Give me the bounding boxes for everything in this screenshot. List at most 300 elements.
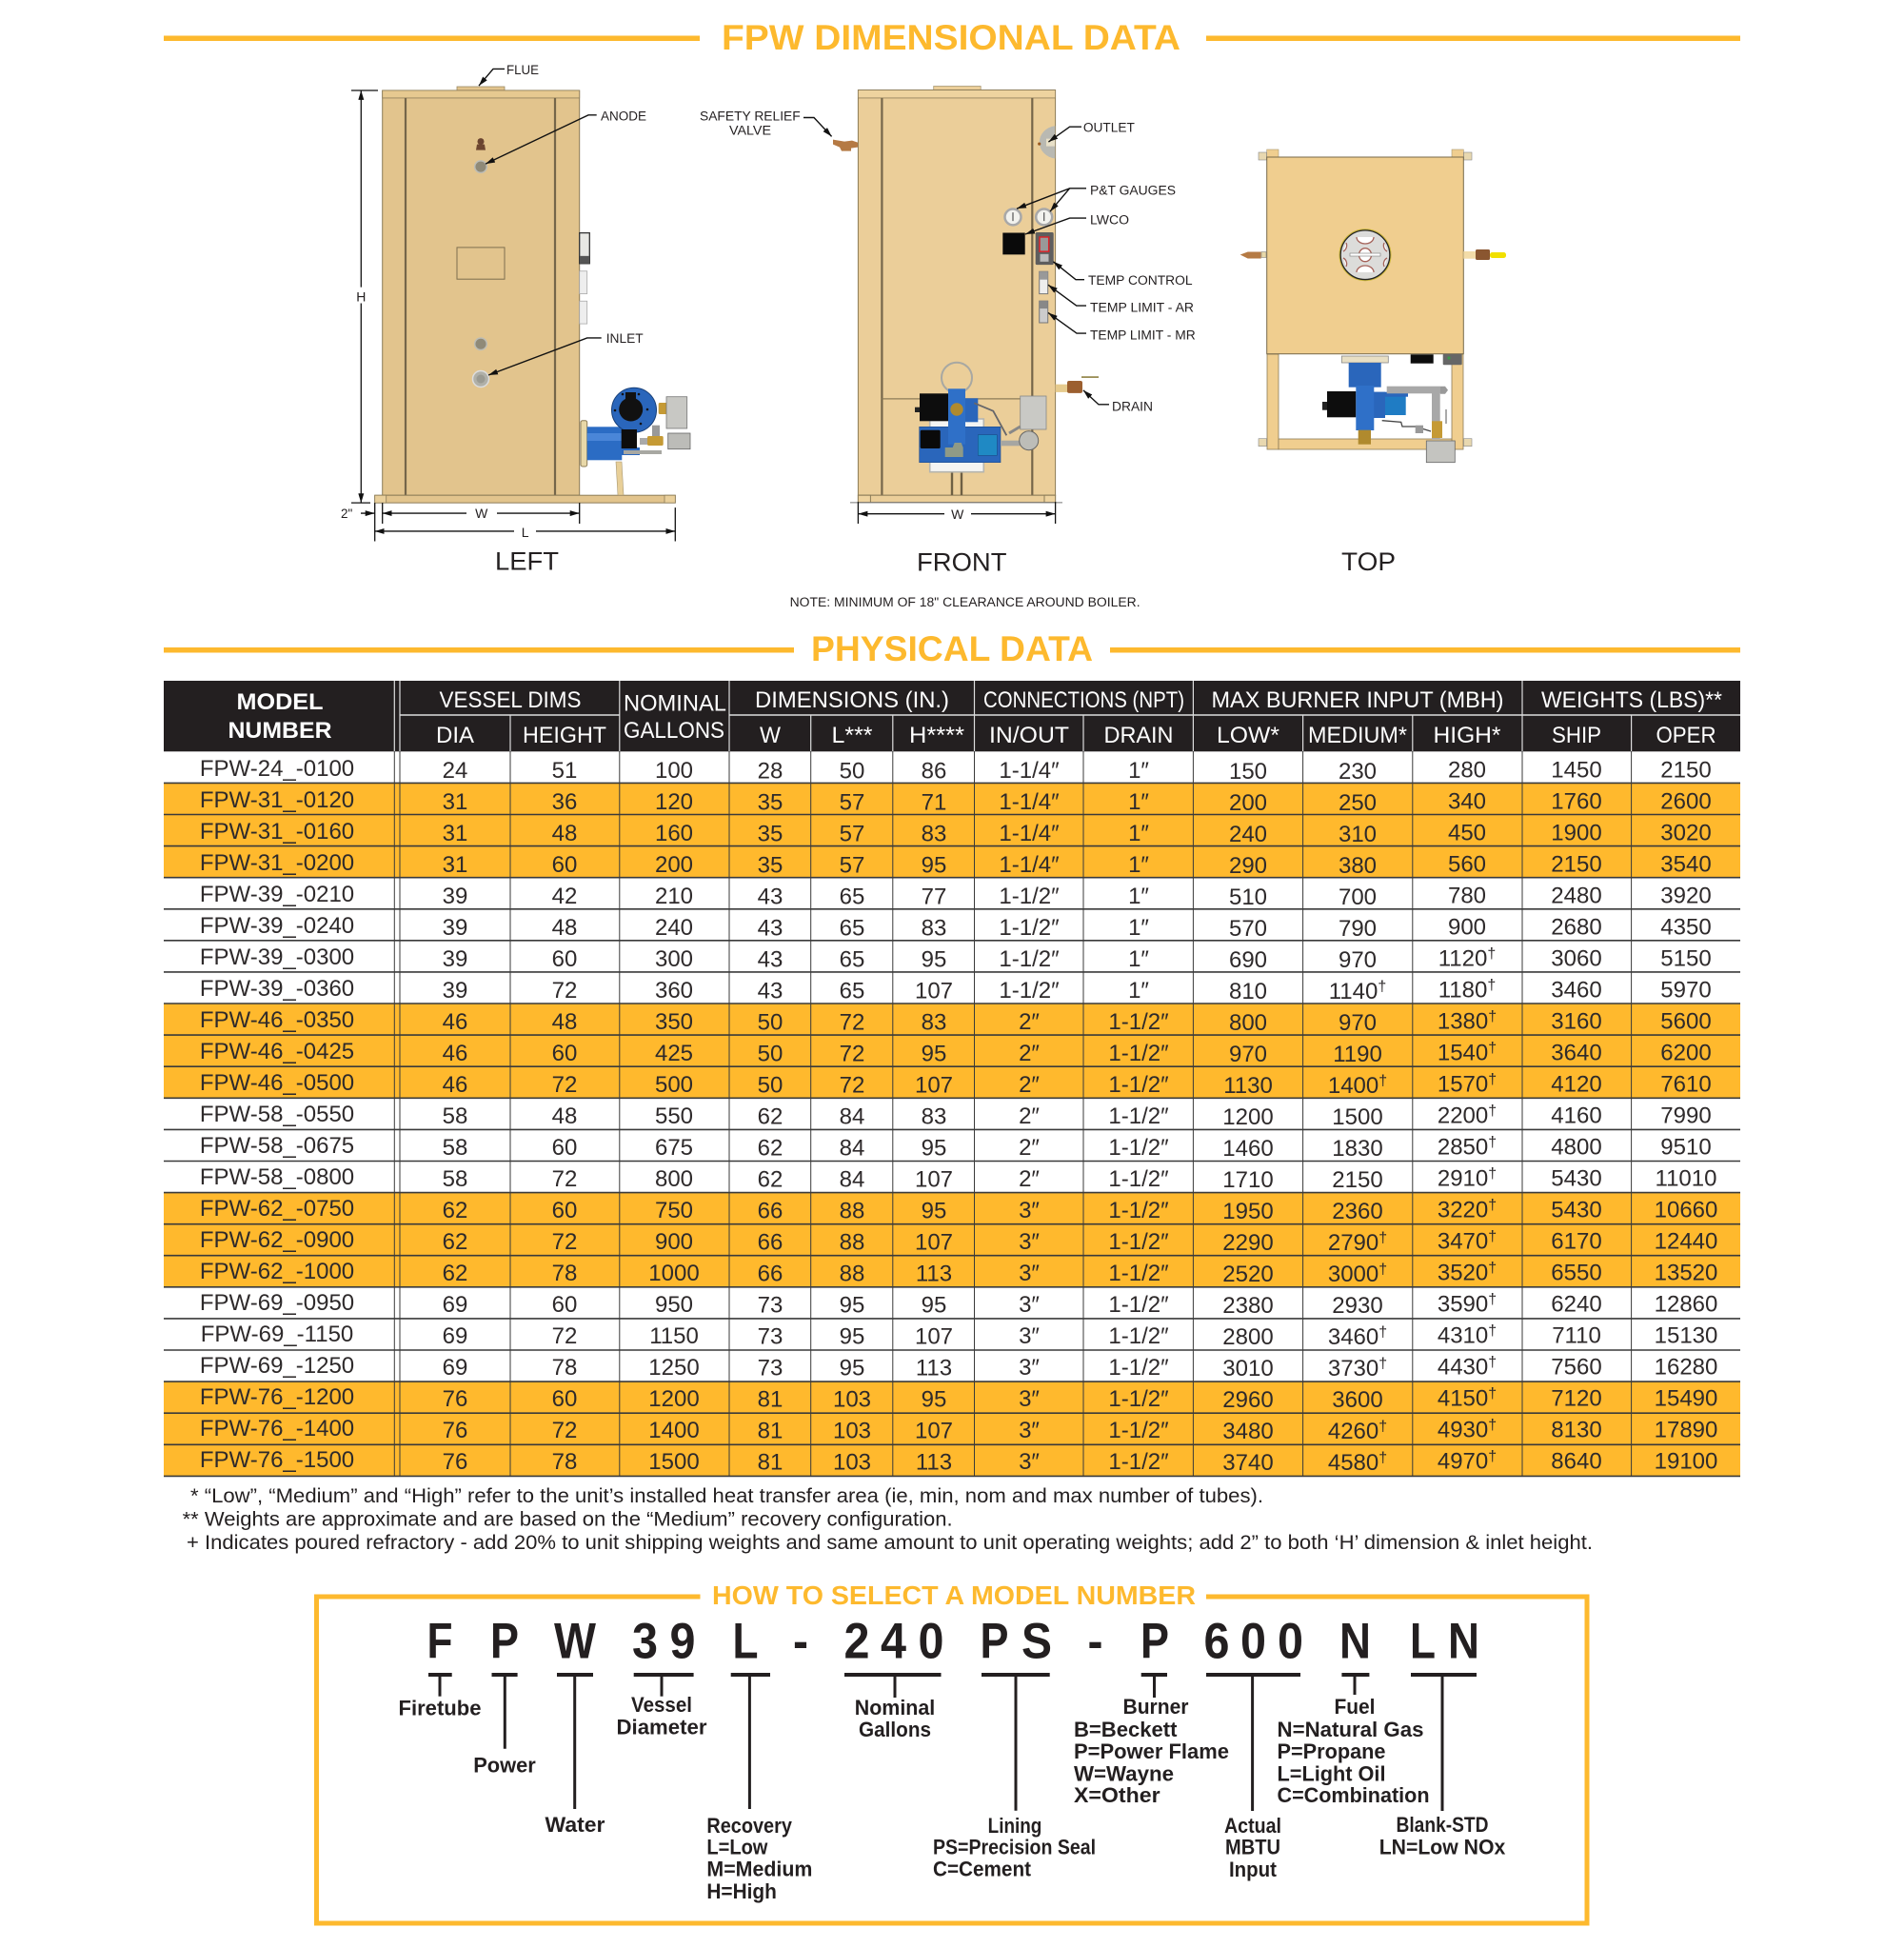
row FPW-69_-1150: 15130 xyxy=(1655,1322,1717,1348)
row FPW-58_-0550: 1500 xyxy=(1332,1104,1383,1130)
row FPW-62_-0750: 62 xyxy=(443,1198,467,1223)
row FPW-62_-0900 xyxy=(164,1224,1740,1256)
row FPW-58_-0800: † xyxy=(1488,1165,1497,1182)
key: NOx option xyxy=(1379,1675,1506,1859)
burner left xyxy=(581,388,690,495)
row FPW-39_-0300: 95 xyxy=(922,946,946,972)
row FPW-62_-0900: 107 xyxy=(915,1230,953,1255)
callout: inlet xyxy=(488,331,644,375)
row FPW-62_-1000: 1000 xyxy=(648,1261,700,1286)
row FPW-46_-0500: 1570 xyxy=(1438,1071,1488,1097)
key: actual MBTU input: MBTU xyxy=(1225,1836,1280,1859)
table header: L*** xyxy=(832,723,872,748)
row FPW-31_-0120: 57 xyxy=(840,789,864,815)
row FPW-76_-1200: 4150 xyxy=(1438,1386,1488,1411)
row FPW-39_-0300: 65 xyxy=(840,946,864,972)
key: nominal gallons: Gallons xyxy=(859,1718,931,1741)
callout: outlet xyxy=(1038,121,1135,159)
row FPW-46_-0425: 60 xyxy=(552,1041,577,1066)
row FPW-58_-0550: 1200 xyxy=(1222,1104,1274,1130)
row FPW-69_-1150: FPW-69_-1150 xyxy=(201,1322,353,1347)
key: burner: W=Wayne xyxy=(1074,1762,1174,1786)
table header: MEDIUM* xyxy=(1308,723,1407,748)
row FPW-69_-0950 xyxy=(200,1290,1717,1319)
row FPW-69_-1250: 3″ xyxy=(1019,1355,1040,1381)
burner front xyxy=(915,363,1046,495)
row FPW-46_-0500: 1130 xyxy=(1223,1073,1273,1099)
panel: top view diagram xyxy=(1240,149,1506,576)
row FPW-46_-0500: 46 xyxy=(443,1072,467,1098)
row FPW-76_-1400: 1400 xyxy=(648,1418,700,1443)
row FPW-76_-1400: 17890 xyxy=(1655,1418,1717,1443)
row FPW-76_-1500: 4580 xyxy=(1328,1450,1378,1476)
row FPW-62_-0750: 66 xyxy=(758,1198,783,1223)
row FPW-31_-0120: 200 xyxy=(1229,790,1267,816)
row FPW-31_-0200: 1-1/4″ xyxy=(999,852,1060,878)
row FPW-46_-0500: 72 xyxy=(840,1072,864,1098)
row FPW-76_-1200: 95 xyxy=(922,1386,946,1413)
row FPW-58_-0550: 58 xyxy=(443,1103,467,1129)
row FPW-31_-0200: 95 xyxy=(922,852,946,878)
row FPW-31_-0200: 3540 xyxy=(1660,851,1712,877)
row FPW-69_-1250: † xyxy=(1378,1356,1387,1372)
row FPW-69_-1250 xyxy=(200,1353,1717,1381)
dimension: H: H xyxy=(356,289,366,305)
frame and heading xyxy=(316,1580,1587,1923)
row FPW-24_-0100: 2150 xyxy=(1660,757,1712,783)
row FPW-76_-1400: 76 xyxy=(443,1418,467,1443)
table header: NUMBER xyxy=(228,718,331,744)
row FPW-76_-1200: 3″ xyxy=(1019,1386,1040,1412)
row FPW-39_-0210: 1-1/2″ xyxy=(999,884,1060,909)
row FPW-31_-0120: 2600 xyxy=(1660,788,1712,814)
row FPW-62_-0750: 1950 xyxy=(1222,1199,1274,1224)
row FPW-31_-0200: 2150 xyxy=(1551,851,1602,877)
row FPW-39_-0210: 3920 xyxy=(1660,883,1712,908)
row FPW-62_-1000: 66 xyxy=(758,1261,783,1286)
example model code: L xyxy=(733,1614,758,1670)
row FPW-31_-0160: 35 xyxy=(758,821,783,846)
row FPW-62_-0900: 2290 xyxy=(1222,1230,1274,1256)
row FPW-69_-1150: 95 xyxy=(840,1323,864,1349)
key: water: Water xyxy=(545,1813,605,1837)
row FPW-69_-0950: 6240 xyxy=(1551,1291,1602,1317)
row FPW-76_-1200: 60 xyxy=(552,1386,577,1412)
row FPW-24_-0100: 280 xyxy=(1448,757,1486,783)
row FPW-69_-1250: 113 xyxy=(916,1355,952,1381)
row FPW-62_-0900: 88 xyxy=(840,1230,864,1255)
key: actual MBTU input: Input xyxy=(1229,1858,1278,1881)
row FPW-69_-0950: FPW-69_-0950 xyxy=(200,1290,354,1316)
row FPW-39_-0300: 690 xyxy=(1229,947,1267,973)
row FPW-69_-1150: 107 xyxy=(915,1323,953,1349)
row FPW-58_-0550: 84 xyxy=(840,1103,864,1129)
row FPW-39_-0300: 43 xyxy=(758,946,783,972)
panel: front view diagram xyxy=(700,87,1196,577)
row FPW-69_-1150: 3″ xyxy=(1019,1323,1040,1349)
row FPW-39_-0300: 3060 xyxy=(1551,945,1602,971)
row FPW-46_-0425: 3640 xyxy=(1551,1040,1602,1065)
row FPW-46_-0350: 3160 xyxy=(1551,1008,1602,1034)
callout: anode: ANODE xyxy=(601,109,646,123)
row FPW-76_-1400: 72 xyxy=(552,1418,577,1443)
row FPW-31_-0160: 83 xyxy=(922,821,946,846)
row FPW-39_-0240: 900 xyxy=(1448,914,1486,940)
row FPW-31_-0160: 160 xyxy=(655,821,693,846)
table header: VESSEL DIMS xyxy=(440,687,581,713)
row FPW-58_-0675: FPW-58_-0675 xyxy=(200,1133,354,1159)
row FPW-46_-0350: 5600 xyxy=(1660,1008,1712,1034)
row FPW-62_-0750: 95 xyxy=(922,1198,946,1223)
example model code: 4 xyxy=(881,1614,906,1670)
row FPW-62_-1000: 3520 xyxy=(1438,1260,1488,1285)
row FPW-69_-0950: 2380 xyxy=(1222,1293,1274,1319)
table header: DRAIN xyxy=(1104,723,1173,748)
row FPW-69_-1150: 73 xyxy=(758,1323,783,1349)
row FPW-31_-0160: 310 xyxy=(1339,822,1377,847)
row FPW-69_-1150: 1150 xyxy=(649,1323,699,1349)
row FPW-39_-0300: 60 xyxy=(552,946,577,972)
row FPW-76_-1500: FPW-76_-1500 xyxy=(200,1447,354,1473)
row FPW-39_-0210: 39 xyxy=(443,884,467,909)
row FPW-24_-0100: 1450 xyxy=(1551,757,1602,783)
key: actual MBTU input xyxy=(1206,1675,1300,1881)
row FPW-24_-0100: 150 xyxy=(1229,759,1267,785)
row FPW-39_-0240: 570 xyxy=(1229,916,1267,942)
row FPW-31_-0200: 380 xyxy=(1339,853,1377,879)
row FPW-39_-0360: 39 xyxy=(443,978,467,1004)
row FPW-46_-0425: 1-1/2″ xyxy=(1108,1041,1169,1066)
row FPW-62_-1000: † xyxy=(1488,1260,1497,1276)
row FPW-39_-0360: FPW-39_-0360 xyxy=(200,976,354,1002)
row FPW-31_-0120: 120 xyxy=(655,789,693,815)
row FPW-39_-0360: 1140 xyxy=(1329,979,1378,1004)
row FPW-31_-0120: 71 xyxy=(922,789,946,815)
row FPW-39_-0360: 1-1/2″ xyxy=(999,978,1060,1004)
key: fuel: L=Light Oil xyxy=(1278,1762,1386,1786)
row FPW-46_-0500: 50 xyxy=(758,1072,783,1098)
row FPW-46_-0425: 970 xyxy=(1229,1042,1267,1067)
row FPW-31_-0120: 1-1/4″ xyxy=(999,789,1060,815)
table header: DIA xyxy=(436,723,474,748)
key: fuel: P=Propane xyxy=(1278,1739,1386,1763)
row FPW-39_-0360 xyxy=(200,976,1712,1004)
row FPW-58_-0675: 1830 xyxy=(1332,1136,1383,1162)
row FPW-46_-0425: 2″ xyxy=(1019,1041,1040,1066)
tank body front xyxy=(850,87,1062,503)
row FPW-46_-0425: 95 xyxy=(922,1041,946,1066)
row FPW-76_-1400: 103 xyxy=(833,1419,871,1444)
row FPW-69_-0950: 73 xyxy=(758,1292,783,1318)
key: recovery: Recovery xyxy=(706,1814,793,1838)
row FPW-58_-0800: 58 xyxy=(443,1166,467,1192)
callout: P&T gauges xyxy=(1005,183,1176,225)
row FPW-69_-1250: FPW-69_-1250 xyxy=(200,1353,354,1379)
row FPW-58_-0800: 2150 xyxy=(1332,1167,1383,1193)
row FPW-76_-1400: 81 xyxy=(758,1419,783,1444)
callout: LWCO xyxy=(1002,213,1129,254)
footnotes xyxy=(183,1485,1593,1554)
heading: physical data xyxy=(164,629,1740,668)
row FPW-58_-0800: 2910 xyxy=(1438,1165,1488,1191)
example model code: P xyxy=(981,1614,1009,1670)
example model code: 0 xyxy=(918,1614,944,1670)
row FPW-62_-0750: † xyxy=(1488,1197,1497,1213)
row FPW-76_-1400: 8130 xyxy=(1551,1418,1602,1443)
row FPW-31_-0200 xyxy=(164,846,1740,879)
row FPW-76_-1400: 4930 xyxy=(1438,1418,1488,1443)
callout: temp limit MR xyxy=(1040,301,1196,342)
row FPW-62_-1000 xyxy=(164,1256,1740,1287)
row FPW-69_-1250: 1250 xyxy=(648,1355,700,1381)
row FPW-69_-1250: 16280 xyxy=(1655,1354,1717,1380)
row FPW-58_-0800 xyxy=(200,1164,1716,1193)
row FPW-39_-0300: 1-1/2″ xyxy=(999,946,1060,972)
table header xyxy=(164,681,1740,751)
row FPW-39_-0300: 39 xyxy=(443,946,467,972)
row FPW-31_-0200: 1″ xyxy=(1128,852,1149,878)
row FPW-58_-0675: 2850 xyxy=(1438,1134,1488,1160)
row FPW-69_-1150: 2800 xyxy=(1222,1324,1274,1350)
row FPW-46_-0425: 1540 xyxy=(1438,1040,1488,1065)
row FPW-46_-0350: 72 xyxy=(840,1009,864,1035)
row FPW-69_-0950: 95 xyxy=(922,1292,946,1318)
row FPW-46_-0350: 970 xyxy=(1339,1010,1377,1036)
row FPW-62_-0900: 3″ xyxy=(1019,1229,1040,1255)
row FPW-58_-0800: 11010 xyxy=(1656,1165,1716,1191)
row FPW-58_-0675: 58 xyxy=(443,1135,467,1161)
row FPW-76_-1400: 4260 xyxy=(1328,1419,1378,1444)
row FPW-46_-0350: † xyxy=(1488,1008,1497,1024)
panel: how to select a model number xyxy=(316,1580,1587,1923)
row FPW-62_-0900: † xyxy=(1378,1230,1387,1246)
row FPW-39_-0210: 43 xyxy=(758,884,783,909)
handhole xyxy=(1339,229,1391,281)
row FPW-62_-0750: 2360 xyxy=(1332,1199,1383,1224)
callout: LWCO: LWCO xyxy=(1090,213,1129,227)
row FPW-69_-1250: 69 xyxy=(443,1355,467,1381)
row FPW-76_-1200: 1200 xyxy=(648,1386,700,1412)
row FPW-39_-0360: 72 xyxy=(552,978,577,1004)
row FPW-58_-0550: 2″ xyxy=(1019,1103,1040,1129)
table header: SHIP xyxy=(1552,723,1601,748)
example model code: N xyxy=(1339,1614,1371,1670)
row FPW-31_-0160: 1900 xyxy=(1551,820,1602,845)
row FPW-58_-0550: 48 xyxy=(552,1103,577,1129)
row FPW-62_-0750: 60 xyxy=(552,1198,577,1223)
row FPW-76_-1200: 2960 xyxy=(1222,1387,1274,1413)
row FPW-39_-0300: 1120 xyxy=(1438,945,1487,971)
row FPW-46_-0425: 72 xyxy=(840,1041,864,1066)
key: recovery: M=Medium xyxy=(706,1858,812,1881)
row FPW-76_-1500: 78 xyxy=(552,1449,577,1475)
row FPW-39_-0300: 970 xyxy=(1339,947,1377,973)
row FPW-58_-0800: 62 xyxy=(758,1166,783,1192)
row FPW-39_-0240: 39 xyxy=(443,915,467,941)
row FPW-39_-0210 xyxy=(200,882,1712,910)
row FPW-46_-0500: † xyxy=(1378,1073,1387,1089)
row FPW-39_-0360: 3460 xyxy=(1551,977,1602,1003)
dimension: W: W xyxy=(951,507,964,522)
row FPW-76_-1400 xyxy=(164,1413,1740,1444)
row FPW-69_-1150 xyxy=(201,1322,1717,1350)
row FPW-69_-1250: † xyxy=(1488,1354,1497,1370)
callout: temp limit MR: TEMP LIMIT - MR xyxy=(1090,328,1196,342)
row FPW-31_-0120 xyxy=(164,783,1740,816)
key: vessel diameter xyxy=(617,1675,707,1739)
row FPW-76_-1500: † xyxy=(1488,1449,1497,1465)
row FPW-39_-0300: † xyxy=(1487,945,1496,962)
row FPW-62_-0750: 10660 xyxy=(1655,1197,1717,1222)
row FPW-69_-0950: 60 xyxy=(552,1292,577,1318)
row FPW-58_-0550: FPW-58_-0550 xyxy=(200,1102,354,1127)
row FPW-46_-0350: 350 xyxy=(655,1009,693,1035)
row FPW-62_-1000: 3000 xyxy=(1328,1262,1378,1287)
table header: OPER xyxy=(1656,723,1716,748)
row FPW-31_-0160: 240 xyxy=(1229,822,1267,847)
row FPW-62_-1000: † xyxy=(1378,1262,1387,1278)
row FPW-76_-1400: 3″ xyxy=(1019,1418,1040,1443)
example model code: N xyxy=(1448,1614,1479,1670)
row FPW-39_-0210: 780 xyxy=(1448,883,1486,908)
row FPW-58_-0550: 7990 xyxy=(1660,1103,1712,1128)
example model code: P xyxy=(490,1614,519,1670)
row FPW-39_-0360: 5970 xyxy=(1660,977,1712,1003)
table header: W xyxy=(760,723,781,748)
row FPW-31_-0120: 1″ xyxy=(1128,789,1149,815)
row FPW-76_-1500: 3740 xyxy=(1222,1450,1274,1476)
row FPW-69_-1250: 78 xyxy=(552,1355,577,1381)
row FPW-39_-0210: 210 xyxy=(655,884,693,909)
key: burner: X=Other xyxy=(1074,1783,1160,1807)
row FPW-69_-0950: 12860 xyxy=(1655,1291,1717,1317)
row FPW-76_-1500: 1500 xyxy=(648,1449,700,1475)
row FPW-76_-1400: 1-1/2″ xyxy=(1108,1418,1169,1443)
row FPW-24_-0100: 28 xyxy=(758,758,783,784)
row FPW-58_-0675: 1-1/2″ xyxy=(1108,1135,1169,1161)
row FPW-39_-0240: FPW-39_-0240 xyxy=(200,913,354,939)
row FPW-76_-1400: † xyxy=(1378,1419,1387,1435)
row FPW-31_-0200: 60 xyxy=(552,852,577,878)
row FPW-31_-0200: 35 xyxy=(758,852,783,878)
callout: safety relief valve xyxy=(700,109,858,151)
row FPW-31_-0160 xyxy=(164,815,1740,847)
row FPW-58_-0675: 675 xyxy=(655,1135,693,1161)
row FPW-31_-0200: 290 xyxy=(1229,853,1267,879)
row FPW-62_-0750: 1-1/2″ xyxy=(1108,1198,1169,1223)
footnotes: + Indicates poured refractory - add 20% to unit shipping weights and same amount to unit operating weights; add 2” to both ‘H’ dimension & inlet height. xyxy=(187,1532,1593,1554)
row FPW-62_-1000: 6550 xyxy=(1551,1260,1602,1285)
row FPW-58_-0800: 107 xyxy=(915,1166,953,1192)
row FPW-76_-1200: 1-1/2″ xyxy=(1108,1386,1169,1412)
key: nominal gallons: Nominal xyxy=(855,1696,935,1719)
side valves xyxy=(1240,249,1506,260)
row FPW-46_-0425: FPW-46_-0425 xyxy=(200,1039,354,1064)
row FPW-76_-1500: 76 xyxy=(443,1449,467,1475)
row FPW-39_-0300: 1″ xyxy=(1128,946,1149,972)
row FPW-76_-1500: 113 xyxy=(916,1450,952,1476)
row FPW-76_-1200: FPW-76_-1200 xyxy=(200,1384,354,1410)
row FPW-39_-0240 xyxy=(200,913,1712,942)
row FPW-62_-0750: 750 xyxy=(655,1198,693,1223)
row FPW-58_-0675 xyxy=(200,1133,1712,1162)
row FPW-24_-0100: 50 xyxy=(840,758,864,784)
row FPW-46_-0350: 1380 xyxy=(1438,1008,1488,1034)
row FPW-76_-1500: 3″ xyxy=(1019,1449,1040,1475)
row FPW-69_-0950: 95 xyxy=(840,1292,864,1318)
row FPW-76_-1200: 15490 xyxy=(1655,1386,1717,1411)
key: burner: P=Power Flame xyxy=(1074,1739,1229,1763)
row FPW-46_-0500: 72 xyxy=(552,1072,577,1098)
row FPW-69_-0950: 1-1/2″ xyxy=(1108,1292,1169,1318)
row FPW-46_-0425: 50 xyxy=(758,1041,783,1066)
key: lining: C=Cement xyxy=(933,1858,1032,1881)
table header: HEIGHT xyxy=(523,723,606,748)
callout: temp control: TEMP CONTROL xyxy=(1088,273,1193,288)
key: power: Power xyxy=(473,1754,536,1778)
row FPW-62_-1000: 3″ xyxy=(1019,1261,1040,1286)
key: firetube xyxy=(398,1675,482,1720)
row FPW-62_-0750: FPW-62_-0750 xyxy=(200,1196,354,1222)
row FPW-58_-0800: 84 xyxy=(840,1166,864,1192)
row FPW-24_-0100: FPW-24_-0100 xyxy=(200,756,354,782)
row FPW-62_-0900: 900 xyxy=(655,1229,693,1255)
dimension: 2 inch: 2" xyxy=(341,507,353,521)
row FPW-62_-1000: 13520 xyxy=(1655,1260,1717,1285)
row FPW-69_-1250: 3730 xyxy=(1328,1356,1378,1381)
row FPW-31_-0160: 1-1/4″ xyxy=(999,821,1060,846)
row FPW-69_-1250: 4430 xyxy=(1438,1354,1488,1380)
example model code: 2 xyxy=(843,1614,870,1670)
row FPW-76_-1500: 4970 xyxy=(1438,1449,1488,1475)
callout: temp control xyxy=(1036,232,1193,288)
callout: outlet: OUTLET xyxy=(1083,121,1135,135)
row FPW-46_-0350: 800 xyxy=(1229,1010,1267,1036)
row FPW-58_-0675: 2″ xyxy=(1019,1135,1040,1161)
heading: FPW dimensional data xyxy=(164,18,1740,57)
row FPW-39_-0210: 65 xyxy=(840,884,864,909)
row FPW-62_-1000: 1-1/2″ xyxy=(1108,1261,1169,1286)
row FPW-39_-0240: 65 xyxy=(840,915,864,941)
tank body left xyxy=(375,87,675,503)
row FPW-58_-0675: 60 xyxy=(552,1135,577,1161)
row FPW-46_-0425: † xyxy=(1488,1040,1497,1056)
row FPW-31_-0160: FPW-31_-0160 xyxy=(200,819,354,845)
callout: temp limit AR: TEMP LIMIT - AR xyxy=(1090,301,1194,314)
table header: IN/OUT xyxy=(989,723,1069,748)
example model code xyxy=(426,1614,1479,1670)
row FPW-46_-0425: 425 xyxy=(655,1041,693,1066)
example model code: W xyxy=(554,1614,596,1670)
row FPW-69_-1250: 7560 xyxy=(1551,1354,1602,1380)
row FPW-24_-0100: 1″ xyxy=(1128,758,1149,784)
row FPW-76_-1200: 3600 xyxy=(1332,1387,1383,1413)
table header: MODEL xyxy=(236,689,324,715)
row FPW-46_-0500: FPW-46_-0500 xyxy=(200,1070,354,1096)
row FPW-39_-0210: FPW-39_-0210 xyxy=(200,882,354,907)
row FPW-69_-0950: † xyxy=(1488,1291,1497,1307)
key: actual MBTU input: Actual xyxy=(1224,1814,1281,1838)
row FPW-69_-1150: 72 xyxy=(552,1323,577,1349)
label: FRONT: FRONT xyxy=(917,548,1006,577)
callout: safety relief valve: VALVE xyxy=(729,124,771,137)
row FPW-46_-0500 xyxy=(164,1066,1740,1099)
footnotes: ** Weights are approximate and are based on the “Medium” recovery configuration. xyxy=(183,1509,953,1531)
callout: P&T gauges: P&T GAUGES xyxy=(1090,183,1176,197)
row FPW-76_-1200 xyxy=(164,1381,1740,1413)
row FPW-76_-1500: 19100 xyxy=(1655,1449,1717,1475)
row FPW-69_-1150: 69 xyxy=(443,1323,467,1349)
